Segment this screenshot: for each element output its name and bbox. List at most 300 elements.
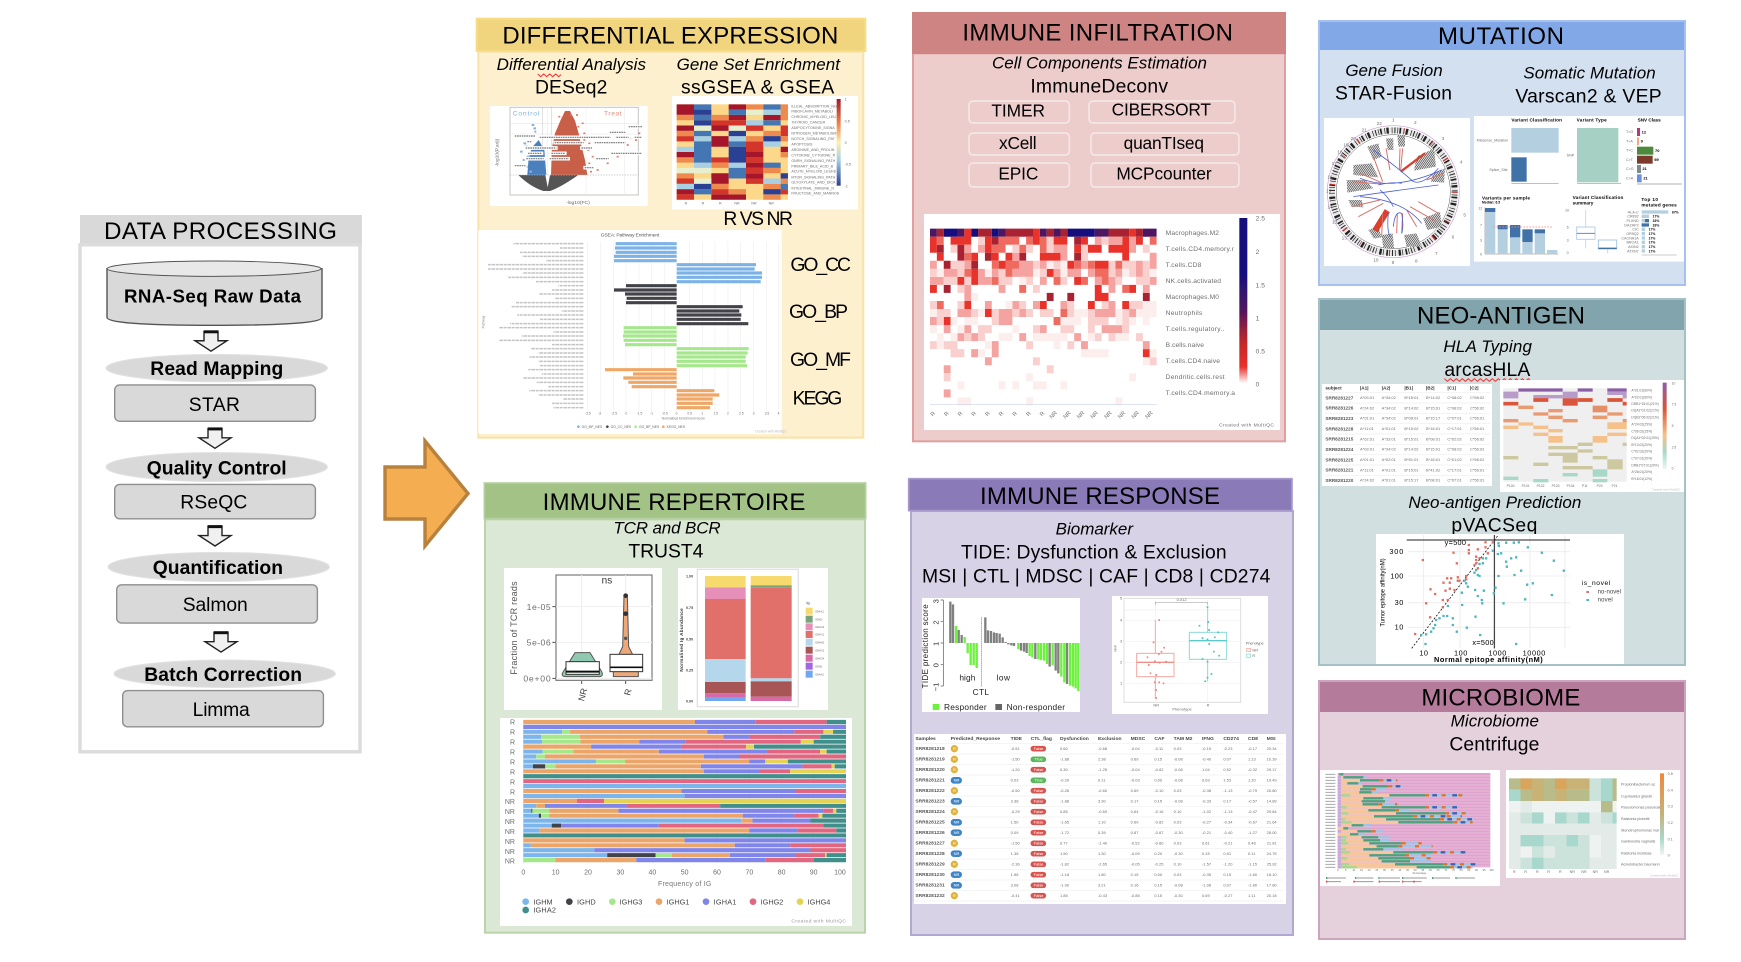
table: TIDE results [914, 734, 1286, 904]
chart: biomarker box plot: 4 [1120, 618, 1123, 623]
chart: mutation summary: Splice_Site [1489, 168, 1508, 172]
chart: microbe abundance heatmap: Created with MultiQC [1650, 873, 1679, 877]
tool: STAR [115, 385, 315, 421]
table: TIDE results: SRR8281232 [915, 893, 945, 899]
chart: TIDE prediction waterfall: 1 [932, 642, 941, 646]
table: HLA genotypes: C*56:01 [1470, 467, 1485, 472]
chart: epitope affinity scatter: 300 [1389, 547, 1403, 556]
chart: mutation summary: Variant Classification [1573, 195, 1623, 200]
chart: TIDE prediction waterfall: 0 [932, 663, 941, 667]
table: TIDE results: -0.38 [1202, 788, 1212, 793]
heading: mutation: MUTATION [1438, 23, 1564, 50]
table: HLA genotypes: A*01:01 [1382, 467, 1397, 472]
chart: mutation summary: 21 [1643, 175, 1649, 180]
table: HLA genotypes: C*56:02 [1470, 447, 1485, 452]
text: biomarker methods: MSI | CTL | MDSC | CAF | CD8 | CD274 [922, 567, 1271, 588]
table: TIDE results: Exclusion [1098, 736, 1122, 742]
chart: volcano plot: Control [513, 110, 540, 117]
tool buttons [969, 100, 1239, 187]
chart: HLA allele heatmap: DQA1*02:01(25%) [1631, 436, 1659, 440]
chart: microbe abundance heatmap [1506, 770, 1680, 878]
table: TIDE results: -0.60 [1098, 788, 1108, 793]
chart: HLA allele heatmap: A*02:01(50%) [1631, 395, 1652, 399]
chart: volcano plot [490, 106, 648, 206]
table: TIDE results: -0.40 [1202, 757, 1212, 762]
table: TIDE results: 0.03 [1174, 820, 1182, 825]
chart: TCR fraction violin: 1e-05 [527, 602, 551, 612]
chart: microbe abundance heatmap: NR [1593, 870, 1598, 874]
chart: circos gene fusion plot: 7 [1435, 251, 1438, 256]
table: TIDE results: 0.87 [1131, 830, 1139, 835]
chart: epitope affinity scatter: 10 [1395, 622, 1403, 631]
chart: epitope affinity scatter: novel [1598, 598, 1613, 604]
table: TIDE results: 0.77 [1060, 841, 1069, 846]
chart: circos gene fusion plot: 13 [1332, 219, 1338, 224]
table: HLA genotypes: B*08:01 [1426, 478, 1441, 483]
chart: TIDE prediction waterfall: 2 [932, 620, 941, 625]
table: TIDE results: -0.50 [1011, 788, 1021, 793]
table: TIDE results: 19.49 [1267, 778, 1277, 783]
table: TIDE results: MSI [1267, 736, 1276, 742]
chart: Ig frequency stacked bars: NR [505, 849, 515, 856]
chart: circos gene fusion plot: 18 [1337, 149, 1343, 154]
table: TIDE results: R [953, 788, 956, 793]
chart: Ig frequency stacked bars: NR [505, 799, 515, 806]
chart: microbe abundance heatmap: 0.4 [1668, 788, 1673, 792]
table: TIDE results: 0.69 [1131, 788, 1139, 793]
table: TIDE results: False [1034, 841, 1044, 846]
chart: epitope affinity scatter: 100 [1454, 649, 1467, 658]
table: TIDE results: 0.07 [1223, 757, 1232, 762]
table: TIDE results: NR [954, 883, 960, 888]
table: HLA genotypes: C*08:02 [1447, 395, 1463, 400]
table: TIDE results: SRR8281220 [915, 767, 945, 773]
table: TIDE results: -0.68 [1098, 746, 1108, 751]
table: TIDE results: NR [954, 778, 960, 783]
table: TIDE results: 1.50 [1060, 851, 1069, 856]
chart: Ig abundance stacked bars: IGHA2 [815, 672, 824, 676]
table: TIDE results: SRR8281225 [915, 820, 945, 826]
table: TIDE results: SRR8281219 [915, 757, 945, 763]
step: quality control [106, 452, 327, 482]
chart: microbiome stacked bars: 90 [1475, 868, 1478, 872]
chart: circos gene fusion plot: 4 [1460, 159, 1463, 164]
chart: Ig frequency stacked bars: IGHG3 [620, 897, 642, 906]
chart: microbiome stacked bars: 45 [1406, 868, 1409, 872]
table: TIDE results: -0.08 [1174, 799, 1184, 804]
heading: differential expression: DIFFERENTIAL EXPRESSION [502, 22, 838, 49]
chart: microbiome stacked bars: 5 [1345, 868, 1347, 872]
chart: circos gene fusion plot: 21 [1362, 128, 1367, 133]
table: TIDE results: -1.50 [1011, 757, 1021, 762]
chart: enrichment heatmap: ARGININE_AND_PROLIN [791, 148, 835, 152]
chart: microbe abundance heatmap: Gardnerella vaginalis [1621, 840, 1656, 844]
table: TIDE results: 3.30 [1098, 799, 1107, 804]
tool: Limma [123, 691, 323, 727]
table: TIDE results: R [953, 809, 956, 814]
table: TIDE results: 0.51 [1223, 851, 1232, 856]
chart: circos gene fusion plot: 22 [1377, 121, 1382, 126]
chart: immune cell heatmap: NR [1076, 410, 1086, 420]
table: TIDE results: 0.15 [1202, 851, 1211, 856]
chart: TIDE prediction waterfall: high [959, 673, 976, 683]
table: HLA genotypes: subject [1325, 385, 1342, 390]
table: TIDE results: 0.03 [1174, 746, 1182, 751]
table: TIDE results: -1.27 [1248, 830, 1258, 835]
chart: mutation summary: 3 [1567, 238, 1569, 242]
table: HLA genotypes [1322, 384, 1492, 486]
arrow: quality control to quantification [199, 525, 231, 546]
chart: microbiome stacked bars: 75 [1452, 868, 1455, 872]
table: TIDE results: -1.20 [1011, 767, 1021, 772]
text: biomarker methods: Biomarker [1056, 519, 1134, 538]
table: HLA genotypes: B*51:01 [1404, 457, 1419, 462]
chart: immune cell heatmap: NK.cells.activated [1166, 278, 1221, 285]
chart: GSEA pathway enrichment bars: Pathway [482, 315, 486, 328]
chart: GSEA pathway enrichment bars: 0 [676, 412, 678, 416]
table: HLA genotypes: C*02:02 [1447, 436, 1463, 441]
table: TIDE results: MDSC [1131, 736, 1146, 742]
chart: immune cell heatmap: T.cells.CD4.naive [1166, 358, 1220, 365]
chart: immune cell heatmap: NR [1131, 410, 1141, 420]
table: TIDE results: NR [954, 820, 960, 825]
chart: Ig frequency stacked bars: R [510, 770, 515, 777]
chart: Ig frequency stacked bars: 40 [648, 870, 656, 877]
text: biomarker methods [922, 519, 1271, 588]
table: TIDE results: SRR8281226 [915, 830, 945, 836]
chart: enrichment heatmap: PRIMARY_BILE_ACID_B [791, 164, 834, 168]
chart: immune cell heatmap: NR [1104, 410, 1114, 420]
chart: immune cell heatmap: Created with MultiQC [1219, 423, 1274, 429]
chart: mutation summary: 7 [1480, 223, 1482, 227]
chart: circos gene fusion plot: 15 [1326, 189, 1332, 194]
table: TIDE results: False [1034, 872, 1044, 877]
chart: mutation summary: 17% [1649, 241, 1655, 245]
chart: Ig frequency stacked bars: IGHG2 [761, 897, 783, 906]
chart: HLA allele heatmap: A*26:01(20%) [1631, 470, 1652, 474]
table: HLA genotypes: SRR8281228 [1325, 426, 1354, 431]
chart: enrichment heatmap: R [702, 201, 705, 205]
chart: GSEA pathway enrichment bars: 2 [727, 412, 729, 416]
table: TIDE results: -0.41 [1011, 893, 1021, 898]
chart: Ig frequency stacked bars [500, 718, 852, 926]
chart: microbe abundance heatmap: R [1536, 870, 1539, 874]
chart: HLA allele heatmap: B*13:02(20%) [1631, 443, 1652, 447]
text: HLA typing method: HLA Typing [1443, 337, 1533, 356]
table: TIDE results: CAF [1154, 736, 1165, 742]
chart: microbiome stacked bars: 10 [1352, 868, 1356, 872]
chart: mutation summary: 17% [1649, 245, 1655, 249]
table: TIDE results: R [953, 893, 956, 898]
table: HLA genotypes: B*08:01 [1404, 416, 1419, 421]
text: TCR and BCR method: TCR and BCR [613, 518, 721, 537]
arrow: raw data to read mapping [195, 330, 227, 351]
chart: enrichment heatmap: 0 [845, 141, 847, 145]
chart: HLA allele heatmap: 7.5 [1672, 403, 1676, 407]
step: batch correction: Batch Correction [144, 665, 302, 686]
chart: HLA allele heatmap: B*18:01(12%) [1631, 477, 1652, 481]
chart: circos gene fusion plot: 2 [1414, 120, 1417, 125]
chart: Ig frequency stacked bars: R [510, 740, 515, 747]
chart: mutation summary: ATXN7 [1627, 249, 1639, 253]
chart: biomarker box plot: 2 [1120, 660, 1123, 665]
arrow: read mapping to quality control [199, 427, 231, 448]
table: TIDE results: -0.85 [1131, 893, 1141, 898]
chart: microbiome stacked bars: 95 [1483, 868, 1486, 872]
table: TIDE results: R [953, 862, 956, 867]
table: HLA genotypes: B*15:17 [1426, 416, 1441, 421]
chart: epitope affinity scatter: no-novel [1598, 590, 1621, 596]
chart: mutation summary: 17% [1649, 249, 1655, 253]
chart: epitope affinity scatter: y=500 [1445, 538, 1466, 547]
chart: biomarker box plot: 5 [1120, 595, 1123, 600]
table: TIDE results: False [1034, 893, 1044, 898]
table: HLA genotypes: SRR8281226 [1325, 406, 1354, 411]
chart: TCR fraction violin [504, 568, 662, 710]
table: TIDE results: -0.32 [1248, 767, 1258, 772]
table: TIDE results: -1.20 [1223, 862, 1233, 867]
chart: mutation summary: summary [1573, 200, 1594, 205]
chart: enrichment heatmap: ILLEAL_ABSORPTION_NG [791, 104, 837, 108]
table: HLA genotypes: |B2| [1426, 385, 1435, 390]
table: TIDE results: -1.25 [1098, 767, 1108, 772]
table: TIDE results: SRR8281222 [915, 788, 945, 794]
chart: Ig frequency stacked bars: NR [505, 829, 515, 836]
chart: mutation summary: SNP [1567, 153, 1575, 157]
table: TIDE results: -0.08 [1174, 767, 1184, 772]
chart: enrichment heatmap: CHRONIC_MYELOID_LEU [791, 115, 836, 119]
table: TIDE results: 10.39 [1267, 757, 1277, 762]
text: gene set enrichment method: Gene Set Enrichment [677, 55, 841, 74]
table: HLA genotypes: C*07:01 [1447, 416, 1463, 421]
chart: Ig frequency stacked bars: IGHA1 [714, 897, 736, 906]
table: TIDE results: -0.82 [1154, 767, 1164, 772]
table: TIDE results: CD8 [1248, 736, 1258, 742]
table: HLA genotypes: C*08:02 [1447, 447, 1463, 452]
chart: microbe abundance heatmap: Acinetobacter baumann [1621, 863, 1660, 867]
chart: microbe abundance heatmap: Propionibacterium ac [1621, 783, 1656, 787]
chart: HLA allele heatmap: P11 [1582, 484, 1588, 488]
tool: Salmon [117, 585, 317, 623]
table: TIDE results: -2.36 [1011, 862, 1021, 867]
table: TIDE results: 1.30 [1098, 851, 1107, 856]
chart: Ig frequency stacked bars: R [510, 789, 515, 796]
chart: Ig frequency stacked bars: NR [505, 858, 515, 865]
table: TIDE results: -0.80 [1154, 841, 1164, 846]
table: TIDE results: 1.13 [1248, 757, 1257, 762]
table: TIDE results: 0.15 [1154, 893, 1163, 898]
chart: Ig abundance stacked bars: IGHG2 [815, 648, 825, 652]
table: TIDE results: 0.11 [1248, 851, 1256, 856]
table: TIDE results: R [953, 757, 956, 762]
chart: HLA allele heatmap: P102 [1537, 484, 1545, 488]
chart: microbe abundance heatmap: R [1547, 870, 1550, 874]
panel: differential expression [477, 19, 865, 438]
chart: GSEA pathway enrichment bars: 2.5 [739, 412, 744, 416]
chart: epitope affinity scatter: 100 [1390, 571, 1403, 580]
chart: GSEA pathway enrichment bars: GSEA: Pathway Enrichment [601, 232, 660, 238]
chart: HLA allele heatmap: C*07:01(20%) [1631, 457, 1652, 461]
table: HLA genotypes: SRR8281227 [1325, 395, 1354, 400]
table: HLA genotypes: |B1| [1404, 385, 1413, 390]
table: TIDE results: 0.69 [1131, 820, 1139, 825]
chart: enrichment heatmap: APOPTOSIS [791, 143, 813, 147]
table: HLA genotypes: C*08:02 [1447, 405, 1463, 410]
table: TIDE results: SRR8281223 [915, 799, 945, 805]
table: TIDE results: -0.30 [1174, 851, 1184, 856]
chart: Ig frequency stacked bars: R [510, 730, 515, 737]
chart: biomarker box plot: 1 [1120, 681, 1123, 686]
step: batch correction [114, 660, 335, 687]
table: HLA genotypes: B*15:01 [1404, 395, 1419, 400]
table: TIDE results: 28.00 [1267, 830, 1277, 835]
table: HLA genotypes: SRR8281220 [1325, 478, 1354, 483]
table: TIDE results: -1.13 [1223, 809, 1233, 814]
chart: GSEA pathway enrichment bars: 3.5 [765, 412, 769, 416]
chart: Ig frequency stacked bars: R [510, 779, 515, 786]
chart: Ig frequency stacked bars: 100 [834, 870, 846, 877]
chart: biomarker box plot: R [1207, 702, 1210, 707]
table: TIDE results: 0.15 [1131, 872, 1139, 877]
table: TIDE results: 0.63 [1202, 778, 1211, 783]
table: TIDE results: -1.08 [1202, 883, 1212, 888]
chart: circos gene fusion plot: 10 [1373, 258, 1379, 263]
text: TCR and BCR method: TRUST4 [628, 542, 704, 563]
chart: biomarker box plot: R [1252, 653, 1255, 658]
tool: RSeQC [115, 484, 315, 519]
chart: immune cell heatmap: 1.5 [1256, 282, 1265, 289]
table: TIDE results: -0.20 [1060, 778, 1070, 783]
table: TIDE results: 0.69 [1131, 757, 1139, 762]
table: TIDE results: 0.16 [1131, 883, 1139, 888]
table: TIDE results: True [1035, 757, 1043, 762]
chart: microbiome stacked bars: 25 [1375, 868, 1379, 872]
chart: GSEA pathway enrichment bars: -2.5 [611, 412, 617, 416]
chart: TIDE prediction waterfall: Responder [944, 702, 987, 712]
chart: Ig frequency stacked bars: IGHM [533, 897, 553, 906]
chart: epitope affinity scatter: Tumor epitope affinity(nM) [1381, 558, 1387, 627]
table: HLA genotypes: A*11:01 [1360, 426, 1375, 431]
chart: GSEA pathway enrichment bars: -3 [598, 412, 601, 416]
table: TIDE results: SRR8281230 [915, 872, 945, 878]
table: TIDE results: SRR8281229 [915, 862, 945, 868]
chart: enrichment heatmap: R [719, 201, 722, 205]
chart: Ig abundance stacked bars: IGHA1 [815, 609, 824, 613]
table: TIDE results: -0.79 [1248, 788, 1258, 793]
chart: Ig frequency stacked bars: 50 [681, 870, 689, 877]
chart: Ig frequency stacked bars: IGHD [577, 897, 596, 906]
chart: enrichment heatmap: MTOR_SIGNALING_PATH [791, 175, 836, 179]
table: TIDE results: -0.33 [1202, 799, 1212, 804]
table: HLA genotypes: C*07:01 [1447, 478, 1463, 483]
chart: epitope affinity scatter [1376, 534, 1624, 664]
chart: HLA allele heatmap: DRB1*07:01(20%) [1631, 463, 1659, 467]
table: TIDE results: -0.25 [1154, 862, 1164, 867]
table: TIDE results: CD274 [1223, 736, 1239, 742]
table: TIDE results: -1.15 [1248, 862, 1258, 867]
table: TIDE results: False [1034, 820, 1044, 825]
chart: enrichment heatmap: 1 [845, 98, 847, 102]
chart: GSEA pathway enrichment bars: GO_MF_NES [582, 425, 603, 429]
chart: Ig abundance stacked bars: Ig [806, 600, 810, 605]
chart: microbiome stacked bars: Percentage [1413, 871, 1427, 875]
chart: microbiome stacked bars: 80 [1460, 868, 1463, 872]
chart: GSEA pathway enrichment bars: -1.5 [637, 412, 643, 416]
table: HLA genotypes: SRR8281225 [1325, 457, 1354, 462]
chart: HLA allele heatmap: DRB1*15:01(21%) [1631, 402, 1659, 406]
table: HLA genotypes: C*56:02 [1470, 395, 1485, 400]
table: TIDE results: 0.15 [1154, 757, 1163, 762]
chart: Ig frequency stacked bars: Frequency of IG [658, 881, 711, 888]
chart: circos gene fusion plot: 8 [1415, 258, 1418, 263]
table: TIDE results: -2.65 [1098, 862, 1108, 867]
chart: enrichment heatmap: INTESTINAL_IMMUNE_N [791, 186, 834, 190]
chart: immune cell heatmap: T.cells.CD4.memory.a [1166, 390, 1235, 397]
table: HLA genotypes: |A1| [1360, 385, 1369, 390]
table: HLA genotypes: A*34:02 [1382, 395, 1397, 400]
chart: mutation summary: 70 [1655, 148, 1660, 153]
chart: mutation summary: C>G [1626, 167, 1634, 171]
chart: microbiome stacked bars: 60 [1429, 868, 1432, 872]
text: differential analysis method: DESeq2 [535, 78, 607, 99]
table: TIDE results: TIDE [1011, 736, 1023, 742]
chart: Ig frequency stacked bars: 0 [521, 870, 525, 877]
chart: GSEA pathway enrichment bars: 1.5 [713, 412, 718, 416]
table: TIDE results: -0.17 [1248, 746, 1258, 751]
table: TIDE results: -0.47 [1248, 809, 1258, 814]
chart: mutation summary: 17% [1649, 228, 1655, 232]
chart: Ig frequency stacked bars: NR [505, 809, 515, 816]
chart: mutation summary: CR892 [1627, 215, 1639, 219]
chart: immune cell heatmap: NR [1063, 410, 1073, 420]
chart: Ig frequency stacked bars: Created with MultiQC [791, 918, 846, 924]
chart: mutation summary: Variant Type [1577, 117, 1607, 122]
table: HLA genotypes: A*01:01 [1382, 478, 1397, 483]
chart: enrichment heatmap: THYROID_CANCER [791, 121, 826, 125]
table: TIDE results: -1.65 [1060, 820, 1070, 825]
table: HLA genotypes: C*01:02 [1447, 457, 1463, 462]
panel: immune repertoire [484, 483, 866, 933]
chart: Ig frequency stacked bars: NR [505, 839, 515, 846]
heading: immune repertoire: IMMUNE REPERTOIRE [543, 489, 805, 516]
chart: HLA allele heatmap: A*24:02(25%) [1631, 422, 1652, 426]
chart: circos gene fusion plot: 3 [1442, 136, 1445, 141]
chart: immune cell heatmap: 0 [1256, 382, 1260, 389]
chart: Ig abundance stacked bars: IGHG1 [815, 633, 825, 637]
chart: microbe abundance heatmap: R [1559, 870, 1562, 874]
label: GO_CC: GO_CC [790, 255, 851, 276]
chart: microbe abundance heatmap: Stenotrophomonas mal [1621, 828, 1659, 832]
chart: HLA allele heatmap: DQA1*01:02(21%) [1631, 409, 1659, 413]
chart: mutation summary: 21 [1642, 166, 1648, 171]
table: TIDE results: -0.10 [1154, 788, 1164, 793]
table: TIDE results: 20.18 [1267, 893, 1277, 898]
table: HLA genotypes: B*08:01 [1426, 436, 1441, 441]
chart: immune cell heatmap: R [930, 411, 937, 418]
chart: microbiome stacked bars: 15 [1360, 868, 1363, 872]
table: TIDE results: False [1034, 830, 1044, 835]
chart: TCR fraction violin: 5e-06 [527, 638, 551, 648]
chart: immune cell heatmap: Macrophages.M0 [1166, 294, 1219, 301]
chart: mutation summary: 67% [1672, 210, 1679, 214]
chart: mutation summary: 3 [1480, 238, 1482, 242]
tool: RSeQC: RSeQC [180, 493, 247, 514]
table: TIDE results: Predicted_Response [951, 736, 1000, 742]
chart: microbe abundance heatmap: 0.5 [1668, 772, 1673, 776]
table: HLA genotypes: B*15:01 [1426, 405, 1441, 410]
table: TIDE results: NR [954, 830, 960, 835]
chart: circos gene fusion plot: 16 [1327, 175, 1333, 180]
